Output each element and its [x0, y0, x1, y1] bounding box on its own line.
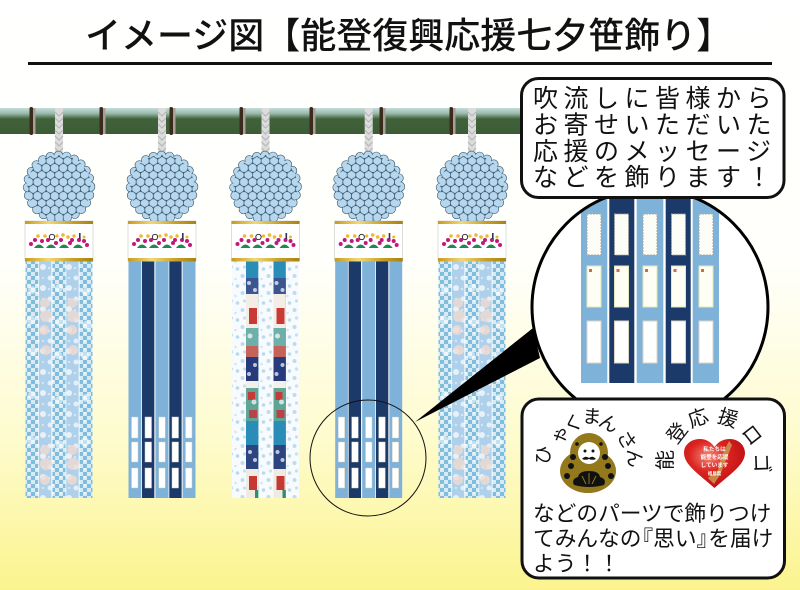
callout: streamer messages: などを飾ります！ — [533, 164, 777, 192]
icon: hyakumansan daruma — [560, 433, 616, 493]
decoration 3 — [232, 108, 300, 498]
icon: heart logo: 福島県 — [708, 470, 722, 477]
label: noto logo arc: ロ — [736, 421, 766, 450]
icon: heart logo: 私たちは — [703, 445, 726, 453]
decoration 4 — [335, 108, 403, 498]
label: noto logo arc: ゴ — [750, 453, 773, 473]
icon: heart logo — [684, 439, 745, 488]
label: hyakumansan arc: さ — [612, 427, 640, 454]
label: hyakumansan arc: ん — [622, 448, 645, 469]
title underline — [28, 62, 772, 65]
label: noto logo arc: 援 — [715, 404, 741, 433]
callout: streamer messages — [522, 78, 784, 198]
label: noto logo arc: 能 — [654, 450, 677, 470]
icon: heart logo: 能登を応援 — [701, 453, 729, 461]
magnifier wedge — [415, 328, 540, 422]
decoration 2 — [128, 108, 196, 498]
label: hyakumansan arc: ん — [595, 411, 622, 438]
label: noto logo arc: 登 — [662, 418, 693, 448]
label: noto logo arc: 応 — [685, 404, 712, 433]
label: hyakumansan arc: ひ — [533, 444, 556, 466]
decoration 1 — [25, 108, 93, 498]
magnified view — [530, 199, 770, 398]
label: hyakumansan arc: く — [561, 411, 586, 438]
label: hyakumansan arc: ま — [582, 406, 602, 429]
label: noto logo arc — [654, 404, 773, 473]
callout: streamer messages: 吹流しに皆様から — [533, 85, 777, 113]
callout: parts — [522, 399, 784, 578]
callout: parts: などのパーツで飾りつけ — [533, 501, 771, 526]
callout: streamer messages: お寄せいただいた — [533, 112, 777, 140]
bamboo pole — [0, 107, 530, 135]
callout: parts: よう！！ — [533, 551, 620, 576]
magnifier small circle — [310, 400, 426, 516]
label: hyakumansan arc: ゃ — [547, 421, 575, 449]
decoration 5 — [438, 108, 506, 498]
icon: heart logo: しています — [701, 462, 729, 469]
title: イメージ図【能登復興応援七夕笹飾り】 — [85, 15, 732, 56]
callout: streamer messages: 応援のメッセージ — [533, 138, 777, 166]
callout: parts: てみんなの『思い』を届け — [533, 526, 773, 551]
label: hyakumansan arc — [533, 406, 645, 469]
